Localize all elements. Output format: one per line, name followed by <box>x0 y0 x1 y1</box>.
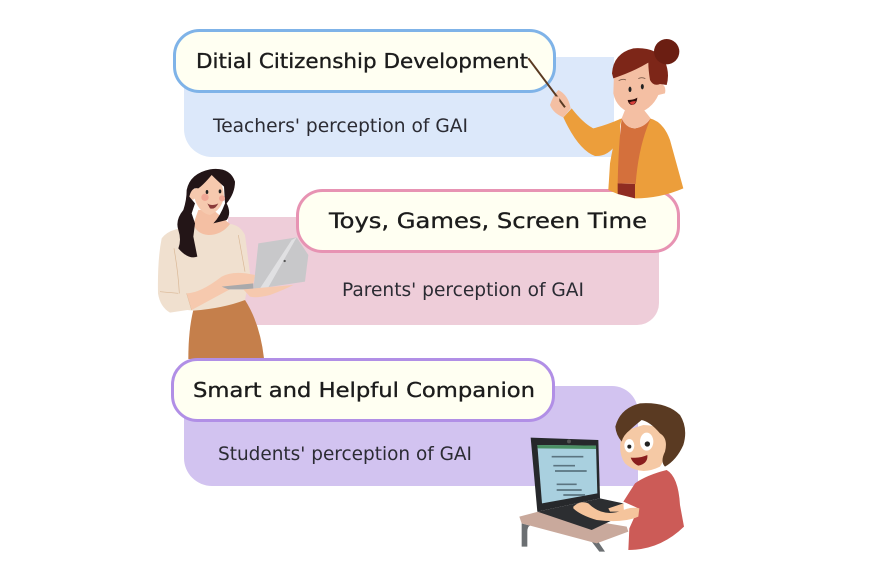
parents perception text: Parents' perception of GAI <box>342 279 584 301</box>
icon: student at laptop <box>519 403 685 552</box>
panel: students <box>184 386 638 486</box>
students panel background <box>184 386 638 486</box>
parents heading pill <box>298 190 678 252</box>
students heading pill: Smart and Helpful Companion <box>193 378 535 402</box>
panel: teachers <box>174 30 614 157</box>
teachers perception text: Teachers' perception of GAI <box>212 115 468 137</box>
parents panel background <box>228 217 659 325</box>
students heading pill <box>172 360 554 420</box>
panel: parents <box>228 190 678 325</box>
teachers panel background <box>184 57 614 157</box>
icon: teacher with pointer <box>528 39 683 198</box>
teachers heading pill <box>174 30 554 92</box>
parents heading pill: Toys, Games, Screen Time <box>328 209 647 234</box>
teachers heading pill: Ditial Citizenship Development <box>196 49 528 73</box>
students perception text: Students' perception of GAI <box>218 443 472 465</box>
icon: parent with laptop <box>158 169 308 359</box>
